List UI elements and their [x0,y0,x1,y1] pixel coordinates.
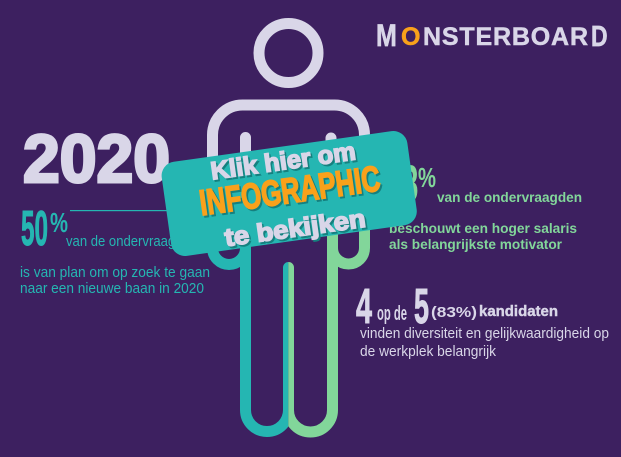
statistic: 4 op de 5: de werkplek belangrijk [360,343,496,360]
badge text: te bekijken [223,205,367,252]
badge text shadow [195,136,389,257]
logo: Monsterboard: D [591,19,608,53]
left statistic: 50%: is van plan om op zoek te gaan [20,265,210,281]
left statistic: 50%: % [50,207,68,238]
right statistic: 83%: beschouwt een hoger salaris [389,220,577,236]
right statistic: 83%: als belangrijkste motivator [389,236,563,252]
logo: Monsterboard: O [401,23,420,51]
right statistic: 83%: 83 [390,157,418,211]
badge text shadow: INFOGRAPHIC [199,159,385,225]
logo: Monsterboard: NSTERBOAR [423,23,588,51]
statistic: 4 op de 5: (83%) [431,304,477,321]
left statistic: 50%: naar een nieuwe baan in 2020 [20,281,204,297]
right statistic: 83% [389,157,582,252]
statistic: 4 op de 5: 5 [414,280,429,334]
statistic: 4 op de 5: kandidaten [479,304,558,320]
right statistic: 83%: van de ondervraagden [437,189,582,205]
figure inner arm stubs [246,138,331,210]
figure left hand and leg [208,246,288,437]
left statistic: 50% [20,202,210,297]
statistic: 4 op de 5 [356,280,609,360]
badge text shadow: Klik hier om [211,139,359,187]
badge text shadow: te bekijken [225,207,369,254]
figure: person outline [212,24,364,432]
left statistic: 50%: 50 [21,202,48,256]
call to action badge [160,129,419,262]
right statistic: 83%: % [418,162,436,193]
badge text: INFOGRAPHIC [197,157,383,223]
statistic: 4 op de 5: 4 [356,280,372,334]
figure shoulders and arms [212,105,364,210]
badge text: Klik hier om [209,137,357,186]
logo: Monsterboard [376,17,608,53]
badge text [194,135,387,255]
figure right hand and leg [288,190,364,432]
left statistic: 50%: van de ondervraagden [66,234,197,250]
logo: Monsterboard: M [376,17,397,53]
figure head [259,24,318,82]
year heading: 2020 [23,121,170,197]
statistic: 4 op de 5: op de [377,303,407,325]
